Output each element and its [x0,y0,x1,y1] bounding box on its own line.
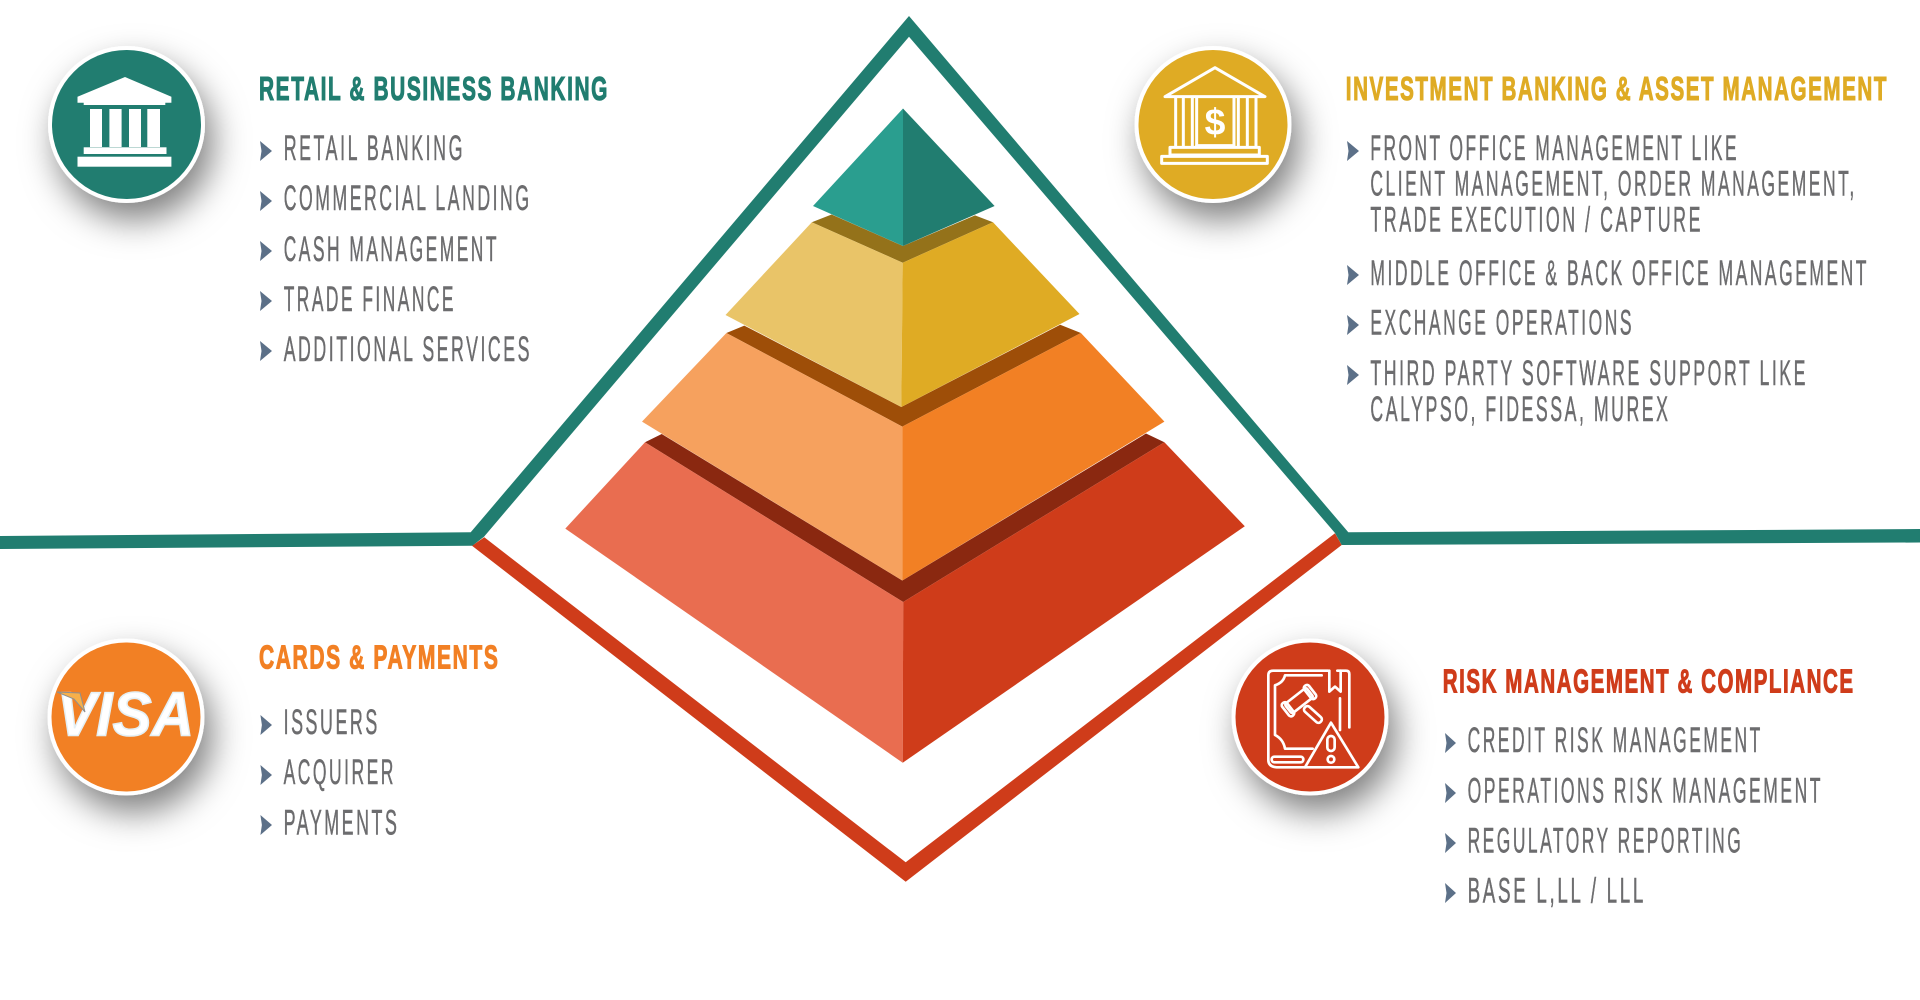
bullet list: investment items: EXCHANGE OPERATIONS [1370,304,1634,343]
icon: bank building on teal circle [48,46,205,203]
pyramid tier: teal top [813,108,995,246]
bullet list: retail items: ADDITIONAL SERVICES [284,330,532,369]
bullet list: cards items: ACQUIRER [284,753,396,792]
bullet list: retail items: CASH MANAGEMENT [284,230,499,269]
bullet list: cards items [260,703,399,843]
pyramid [565,108,1245,763]
bullet list: risk items: BASE L,LL / LLL [1468,872,1646,911]
panel: risk management and compliance [1232,638,1855,911]
panel: retail and business banking [48,46,609,369]
heading: retail and business banking: RETAIL & BUSINESS BANKING [259,70,609,107]
icon: bank with dollar sign on gold circle: $ [1205,100,1226,142]
icon: visa logo on orange circle: VISA [57,680,194,750]
icon: bank with dollar sign on gold circle [1134,46,1292,203]
bullet list: cards items: PAYMENTS [284,804,399,843]
panel: cards and payments [48,638,500,843]
bullet list: retail items: RETAIL BANKING [284,129,465,168]
pyramid tier: red base [565,434,1245,763]
bullet list: retail items: COMMERCIAL LANDING [284,179,532,218]
icon: law book, gavel and warning triangle on red circle [1232,638,1388,796]
frame: red lower diamond outline [472,533,1342,882]
bullet list: cards items: ISSUERS [284,703,380,742]
icon: visa logo on orange circle [48,638,204,796]
bullet list: investment items [1347,129,1869,429]
pyramid tier: gold [726,214,1080,407]
bullet list: risk items [1445,721,1823,911]
bullet list: retail items: TRADE FINANCE [284,280,456,319]
heading: cards and payments: CARDS & PAYMENTS [259,638,500,675]
panel: investment banking and asset management [1134,46,1888,429]
pyramid tier: orange [642,325,1164,580]
bullet list: retail items [260,129,532,369]
frame: teal upper peak with horizontal lines [0,16,1920,549]
